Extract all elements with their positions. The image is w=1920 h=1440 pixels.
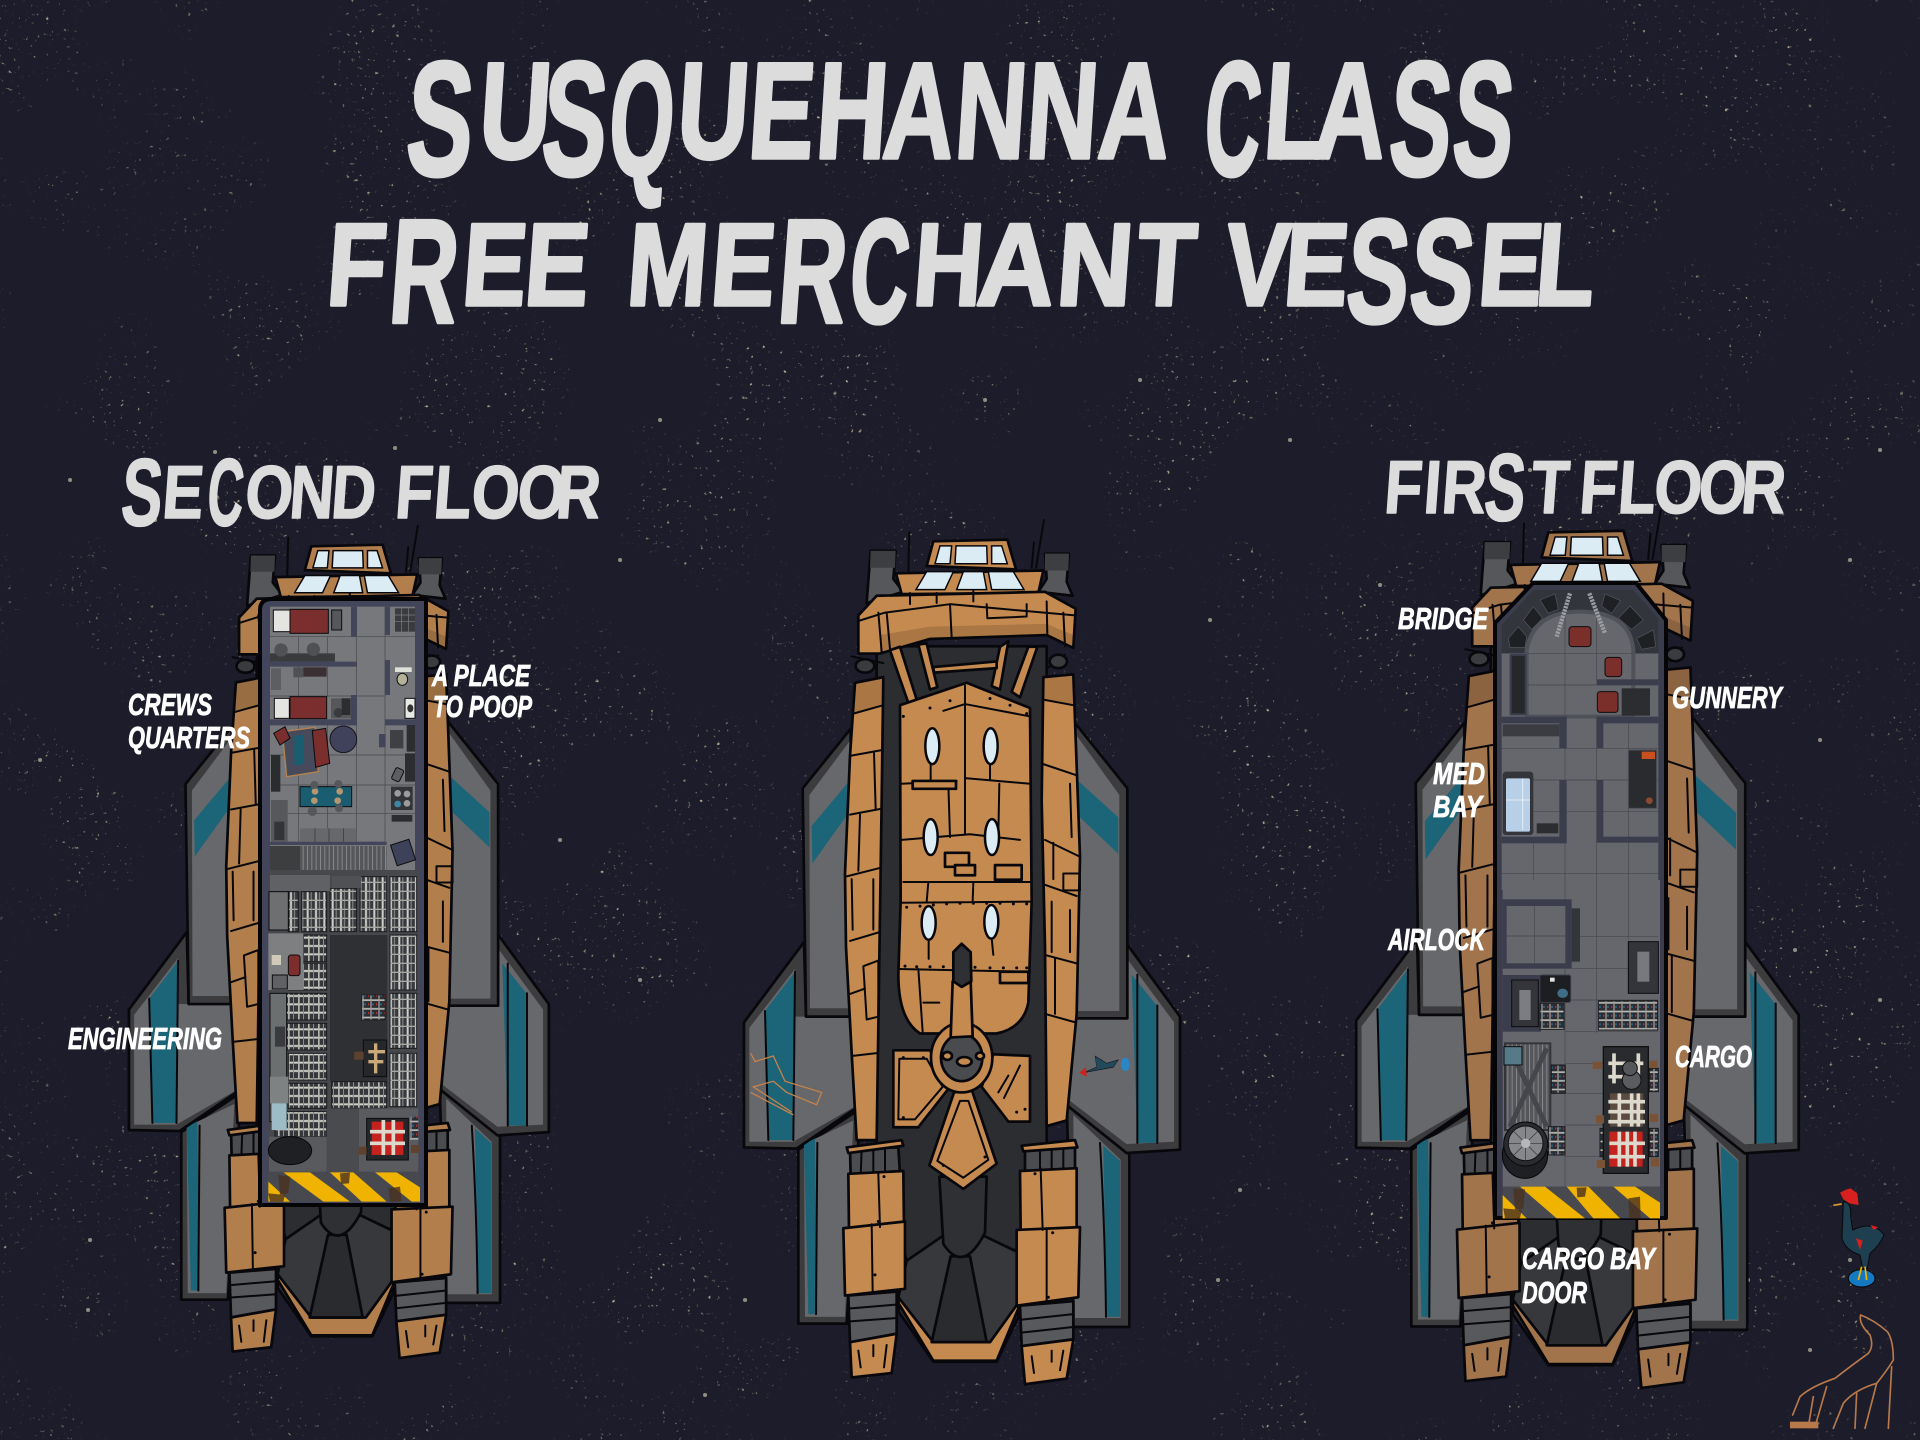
exhaust towers [867, 551, 1073, 603]
artist signature doodle on centre wing [751, 1053, 822, 1115]
small rooster doodle on centre wing [1079, 1056, 1130, 1077]
cargo deck [1502, 880, 1660, 1218]
middle wings [744, 942, 1180, 1153]
weapons locker panel [1628, 750, 1657, 808]
side racks [1548, 1065, 1658, 1157]
deck frame [260, 599, 426, 1205]
heading: first floor: FIRST FLOOR [1381, 434, 1790, 542]
bunk one [270, 609, 342, 662]
hazard stripes [1503, 1187, 1660, 1218]
ship: exterior top view, second floor copy [129, 526, 549, 1358]
medical crate [1540, 975, 1571, 1002]
gun controls [1557, 593, 1605, 637]
floor machine [1628, 942, 1658, 993]
hazard stripes [268, 1172, 420, 1202]
cargo rack [1598, 1001, 1658, 1030]
bridge ring [858, 590, 1076, 654]
label: quarters: QUARTERS [128, 720, 250, 755]
label: bridge: BRIDGE [1398, 601, 1489, 636]
galley [390, 725, 415, 822]
red cargo crate [358, 1117, 419, 1160]
floor [1503, 880, 1660, 1187]
walls [270, 607, 415, 845]
label: to poop: TO POOP [433, 689, 532, 724]
med pod [1503, 772, 1558, 835]
main dorsal hull [898, 683, 1032, 1033]
console screens [1508, 594, 1656, 649]
bridge walkway [1527, 612, 1633, 717]
wall panels at top of bay [270, 875, 361, 891]
small rack [1540, 1003, 1564, 1029]
label: airlock: AIRLOCK [1387, 922, 1487, 957]
tool bench with chair [268, 933, 303, 990]
braced crate [1504, 1043, 1550, 1130]
central dark floor [330, 935, 387, 1082]
storage and bench [271, 800, 416, 866]
tail fins [893, 1050, 1030, 1189]
label: cargo bay: CARGO BAY [1522, 1241, 1657, 1276]
deck plan: first floor [1495, 583, 1666, 1218]
label: gunnery: GUNNERY [1672, 680, 1784, 715]
larger stars [40, 380, 1880, 1395]
main cargo crates [1593, 1047, 1659, 1173]
control machine [269, 892, 288, 930]
bridge and mid deck [1502, 590, 1658, 890]
struts [890, 641, 1037, 703]
engineering bay [268, 870, 420, 1202]
label: engineering: ENGINEERING [68, 1021, 222, 1056]
ship: centre exterior view [744, 520, 1180, 1384]
bathroom [395, 608, 415, 718]
side console [1511, 655, 1526, 714]
label: crews quarters: CREWS [128, 687, 212, 722]
title: Susquehanna Class: SUSQUEHANNA CLASS [402, 28, 1520, 211]
bunk two [271, 667, 351, 719]
living quarters [270, 607, 416, 870]
dorsal turret [931, 944, 992, 1092]
rear wings [798, 1104, 1129, 1327]
small parts rack [362, 995, 385, 1020]
label: cargo: CARGO [1675, 1039, 1752, 1074]
left pod [845, 677, 883, 1140]
lower floor [269, 1137, 359, 1172]
antennae and dishes [852, 520, 1067, 673]
upper wings [803, 721, 1127, 1018]
floor and grid [270, 607, 415, 870]
grate tiles [275, 877, 417, 1137]
reactor column [270, 993, 288, 1130]
medical shelf [1503, 724, 1559, 736]
walls [1502, 717, 1658, 843]
fabricator station [1503, 975, 1541, 1032]
dining table [300, 780, 352, 816]
flywheel [268, 1137, 312, 1165]
heading: second floor: SECOND FLOOR [118, 439, 605, 547]
floor [1502, 653, 1658, 890]
left engine nacelle [843, 1140, 905, 1378]
icon: howling wolf logo [1790, 1315, 1893, 1428]
stairs [270, 846, 387, 870]
lounge [271, 726, 386, 792]
label: bay: BAY [1433, 789, 1485, 824]
ship: exterior top view, first floor copy [1356, 511, 1799, 1388]
hull windows [922, 728, 999, 940]
right engine nacelle [1017, 1140, 1080, 1384]
label: door: DOOR [1522, 1275, 1587, 1310]
dark central hull [877, 646, 1047, 1362]
airlock [1503, 899, 1580, 969]
label: med: MED [1433, 756, 1485, 791]
bridge console arch [1502, 590, 1658, 653]
bridge cupola with windows [896, 540, 1043, 594]
pilot seat [1569, 627, 1591, 647]
deck plan: second floor [260, 599, 426, 1205]
rust marks [268, 1173, 402, 1202]
gunner seat and station [1597, 657, 1658, 716]
rear ramp [898, 1177, 1018, 1361]
base floor [268, 870, 418, 1172]
icon: rooster [1833, 1188, 1884, 1287]
tan crate [354, 1040, 387, 1077]
rust marks [1503, 1187, 1641, 1218]
label: a place: A PLACE [431, 658, 531, 693]
title: Free Merchant Vessel: FREE MERCHANT VESSEL [322, 188, 1601, 354]
large wheel [1502, 1122, 1548, 1178]
right pod [1042, 674, 1080, 1126]
deck frame [1495, 583, 1666, 1218]
